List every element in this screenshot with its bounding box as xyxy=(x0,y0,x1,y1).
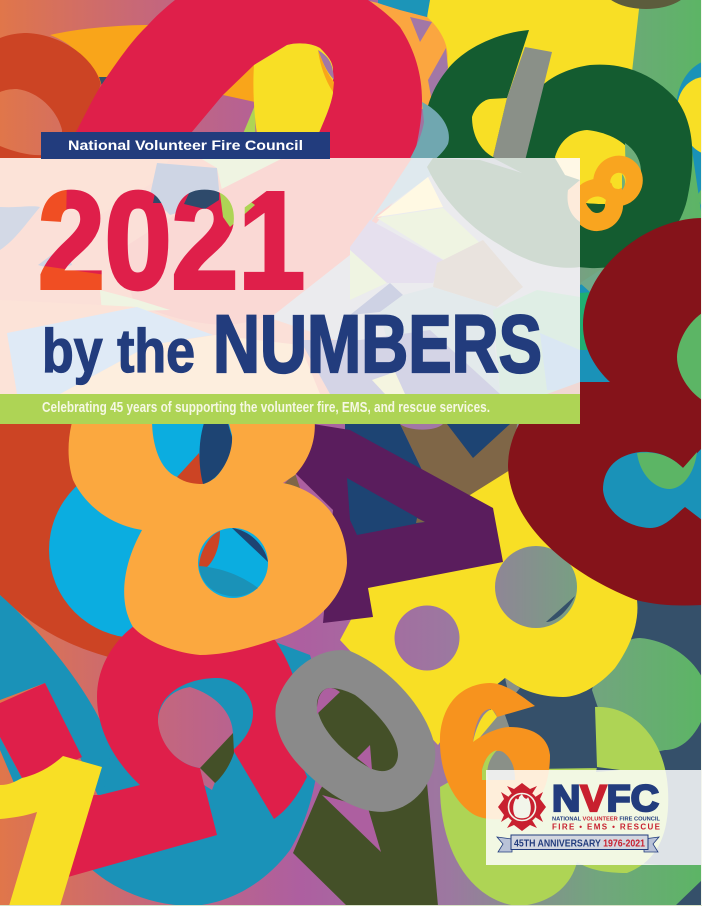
top-left numerals xyxy=(0,25,150,160)
dark green numeral six xyxy=(425,30,692,268)
logo panel xyxy=(486,770,701,865)
teal and yellow right edge xyxy=(580,62,702,390)
logo name line: NATIONAL VOLUNTEER FIRE COUNCIL xyxy=(552,816,661,822)
anniversary ribbon xyxy=(497,835,659,852)
logo wordmark: NVFC xyxy=(552,778,659,819)
small orange eight xyxy=(574,158,640,228)
teal ribbon and disc xyxy=(0,595,320,906)
olive numeral xyxy=(293,740,438,906)
yellow numeral top right xyxy=(365,0,690,180)
grey numeral zero xyxy=(275,650,435,812)
heading: 2021: 2021 xyxy=(38,164,305,318)
dark red numeral eight xyxy=(340,218,702,906)
subtitle band xyxy=(0,394,580,424)
subtitle band: Celebrating 45 years of supporting the volunteer fire, EMS, and rescue services. xyxy=(42,400,490,416)
orange numeral six xyxy=(440,678,550,819)
title bar: National Volunteer Fire Council: National Volunteer Fire Council xyxy=(68,137,303,153)
icon: Maltese cross with flame xyxy=(498,783,546,831)
anniversary ribbon: 45TH ANNIVERSARY 1976-2021 xyxy=(514,838,645,850)
left orange disc and blue disc xyxy=(0,424,225,662)
red numeral five xyxy=(0,625,307,877)
heading: by the: by the xyxy=(42,317,195,385)
logo tagline: FIRE • EMS • RESCUE xyxy=(552,822,661,832)
translucent title panel xyxy=(0,158,580,394)
purple numeral four xyxy=(284,424,503,623)
heading: NUMBERS: NUMBERS xyxy=(213,299,542,390)
yellow numeral one xyxy=(0,756,102,906)
title bar: National Volunteer Fire Council xyxy=(41,132,330,159)
large red numeral two xyxy=(60,0,422,165)
teal ribbon xyxy=(408,102,449,162)
orange numeral eight xyxy=(69,400,347,655)
